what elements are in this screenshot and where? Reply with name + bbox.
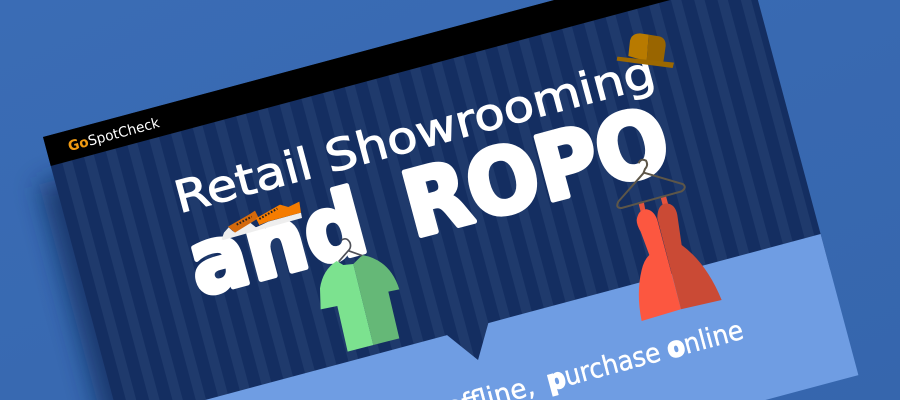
title word: ROPO: ROPO — [392, 87, 680, 259]
dress light half — [637, 209, 681, 321]
light blue speech band — [206, 234, 858, 400]
title line one: Retail Showrooming — [169, 47, 660, 224]
icon: t-shirt on hanger — [320, 239, 399, 352]
title word: and: and — [177, 170, 377, 317]
t-shirt dark half — [353, 255, 399, 345]
tagline: purchase online: purchase online — [544, 315, 747, 397]
icon: bowler hat — [617, 33, 674, 68]
black header bar — [43, 0, 670, 166]
hanger — [617, 160, 685, 208]
icon: shoes — [222, 202, 302, 240]
dress dark half — [657, 203, 722, 309]
icon: red dress on hanger — [617, 160, 722, 321]
hanger hook — [339, 239, 362, 262]
poster drop shadow — [28, 166, 114, 400]
t-shirt light half — [320, 261, 373, 352]
logo: GoSpotCheck: GoSpotCheck — [66, 115, 162, 155]
dress straps — [638, 196, 669, 212]
